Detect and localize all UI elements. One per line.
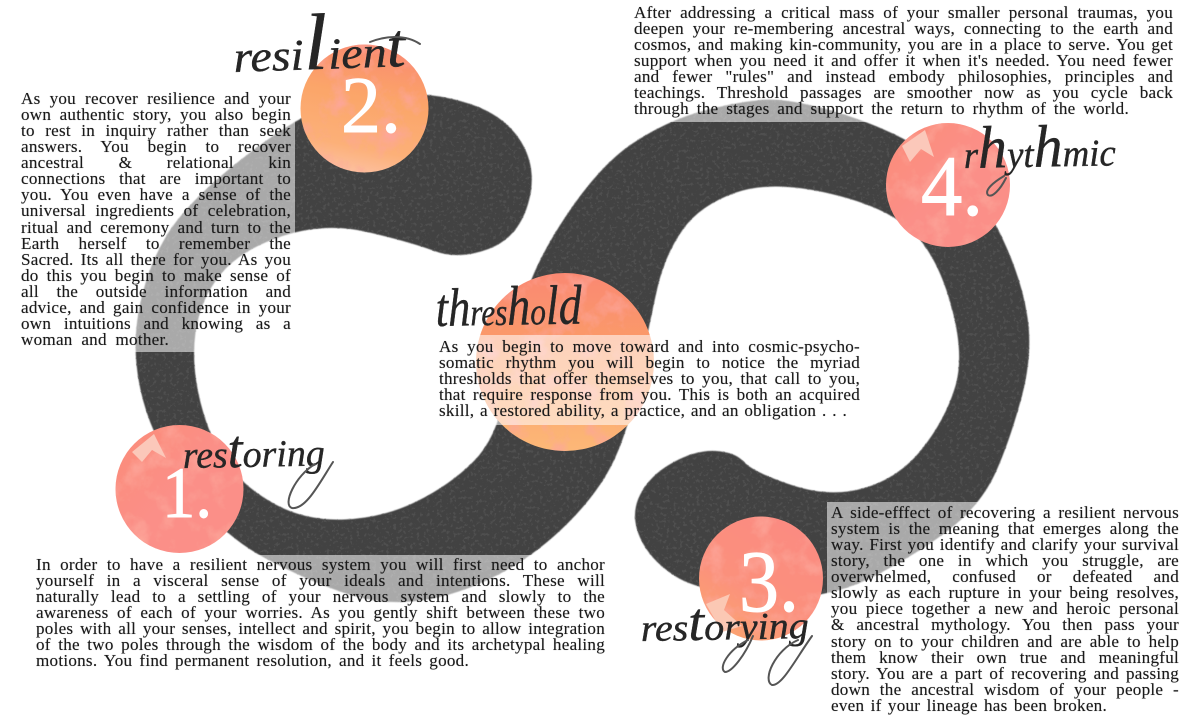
text block: threshold: somatic rhythm you will begin to notice the myriad — [439, 353, 860, 372]
text block: threshold: thresholds that offer themselves to you, that call to you, — [439, 369, 860, 388]
text block: stage 3 restorying — [827, 502, 1185, 718]
text block: stage 3 restorying: story on to your children and are able to help — [831, 632, 1179, 650]
circle: stage 1 — [116, 425, 244, 553]
text block: stage 3 restorying: even if your lineage has been broken. — [831, 696, 1107, 715]
text block: stage 2 resilient — [18, 92, 295, 352]
text block: stage 1 restoring: In order to have a resilient nervous system you will first need to anchor — [36, 555, 605, 574]
label: resilient: resilient — [232, 0, 408, 90]
text block: stage 1 restoring: motions. You find permanent resolution, and it feels good. — [36, 651, 469, 670]
text block: stage 2 resilient: Earth herself to remember the — [21, 234, 291, 253]
text block: stage 3 restorying: overwhelmed, confused or defeated and — [831, 567, 1179, 586]
text block: stage 4 rhythmic: teachings. Threshold passages are smoother now as you cycle back — [634, 83, 1173, 102]
circle: stage 3: 3. — [739, 534, 799, 631]
text block: stage 2 resilient: all the outside information and — [21, 282, 291, 301]
circle: stage 1: 1. — [162, 453, 212, 533]
text block: stage 3 restorying: story. You are a part of recovering and passing — [831, 664, 1179, 683]
text block: stage 4 rhythmic: deepen your re-membering ancestral ways, connecting to the earth and — [634, 19, 1173, 38]
text block: threshold — [435, 335, 865, 425]
infinity loop shape — [136, 94, 1029, 602]
text block: stage 2 resilient: Sacred. Its all there for you. As you — [21, 250, 291, 269]
text block: stage 3 restorying: them know their own true and meaningful — [831, 648, 1179, 667]
circle: stage 4: 4. — [921, 138, 983, 234]
text block: stage 2 resilient: do this you begin to make sense of — [21, 266, 291, 285]
text block: threshold: that require response from you. This is both an acquired — [439, 385, 860, 404]
text block: threshold: As you begin to move toward and into cosmic-psycho- — [439, 337, 860, 356]
text block: stage 4 rhythmic: and fewer "rules" and instead embody philosophies, principles and — [634, 67, 1173, 86]
text block: stage 2 resilient: own intuitions and knowing as a — [21, 314, 291, 333]
text block: stage 2 resilient: ancestral & relational kin — [21, 153, 291, 172]
text block: stage 2 resilient: own authentic story, you also begin — [21, 105, 291, 124]
text block: stage 2 resilient: connections that are important to — [21, 169, 291, 188]
text block: stage 2 resilient: universal ingredients of celebration, — [21, 201, 291, 220]
text block: stage 3 restorying: A side-efffect of recovering a resilient nervous — [831, 503, 1179, 522]
label: rhythmic: rhythmic — [963, 112, 1116, 181]
circle: stage 2: 2. — [341, 62, 401, 150]
text block: stage 4 rhythmic: through the stages and support the return to rhythm of the world. — [634, 99, 1129, 118]
text block: stage 4 rhythmic: After addressing a critical mass of your smaller personal traumas, you — [634, 3, 1173, 22]
text block: stage 2 resilient: answers. You begin to recover — [21, 137, 291, 156]
label: threshold: threshold — [435, 274, 583, 339]
text block: stage 3 restorying: slowly as each rupture in your being resolves, — [831, 583, 1179, 602]
text block: stage 4 rhythmic: support when you need it and offer it when it's needed. You need fewer — [634, 51, 1173, 70]
circle: threshold — [476, 273, 654, 451]
text block: stage 3 restorying: & ancestral mythology. You then pass your — [831, 615, 1179, 634]
text block: stage 4 rhythmic — [630, 0, 1178, 122]
text block: threshold: skill, a restored ability, a practice, and an obligation . . . — [439, 401, 847, 420]
label: restorying: restorying — [640, 590, 809, 653]
text block: stage 3 restorying: story, the one in which you struggle, are — [831, 551, 1179, 570]
text block: stage 1 restoring: yourself in a visceral sense of your ideals and intentions. These will — [36, 571, 605, 590]
text block: stage 2 resilient: ritual and ceremony and turn to the — [21, 218, 291, 236]
circle: stage 4 — [886, 123, 1010, 247]
text block: stage 2 resilient: As you recover resilience and your — [21, 89, 291, 108]
text block: stage 1 restoring: awareness of each of your worries. As you gently shift between these two — [36, 603, 605, 622]
circle: stage 2 — [300, 44, 428, 172]
text block: stage 1 restoring: of the two poles through the wisdom of the body and its archetypal healing — [36, 635, 605, 654]
circle: stage 3 — [699, 516, 823, 640]
text block: stage 3 restorying: system is the meaning that emerges along the — [831, 519, 1179, 538]
text block: stage 2 resilient: to rest in inquiry rather than seek — [21, 121, 291, 140]
text block: stage 1 restoring: poles with all your senses, intellect and spirit, you begin to allow integration — [36, 619, 605, 638]
text block: stage 2 resilient: advice, and gain confidence in your — [21, 298, 291, 317]
text block: stage 1 restoring: naturally lead to a settling of your nervous system and slowly to the — [36, 587, 605, 606]
label: restoring — [182, 418, 333, 508]
text block: stage 2 resilient: woman and mother. — [21, 330, 169, 349]
text block: stage 3 restorying: way. First you identify and clarify your survival — [831, 535, 1179, 554]
text block: stage 4 rhythmic: cosmos, and making kin-community, you are in a place to serve. You get — [634, 35, 1173, 54]
label: restoring: restoring — [182, 418, 325, 480]
text block: stage 1 restoring — [32, 555, 610, 680]
label: restorying — [640, 590, 812, 685]
text block: stage 3 restorying: down the ancestral wisdom of your people - — [831, 680, 1179, 699]
text block: stage 3 restorying: you piece together a new and heroic personal — [831, 599, 1179, 618]
text block: stage 2 resilient: you. You even have a sense of the — [21, 185, 291, 204]
